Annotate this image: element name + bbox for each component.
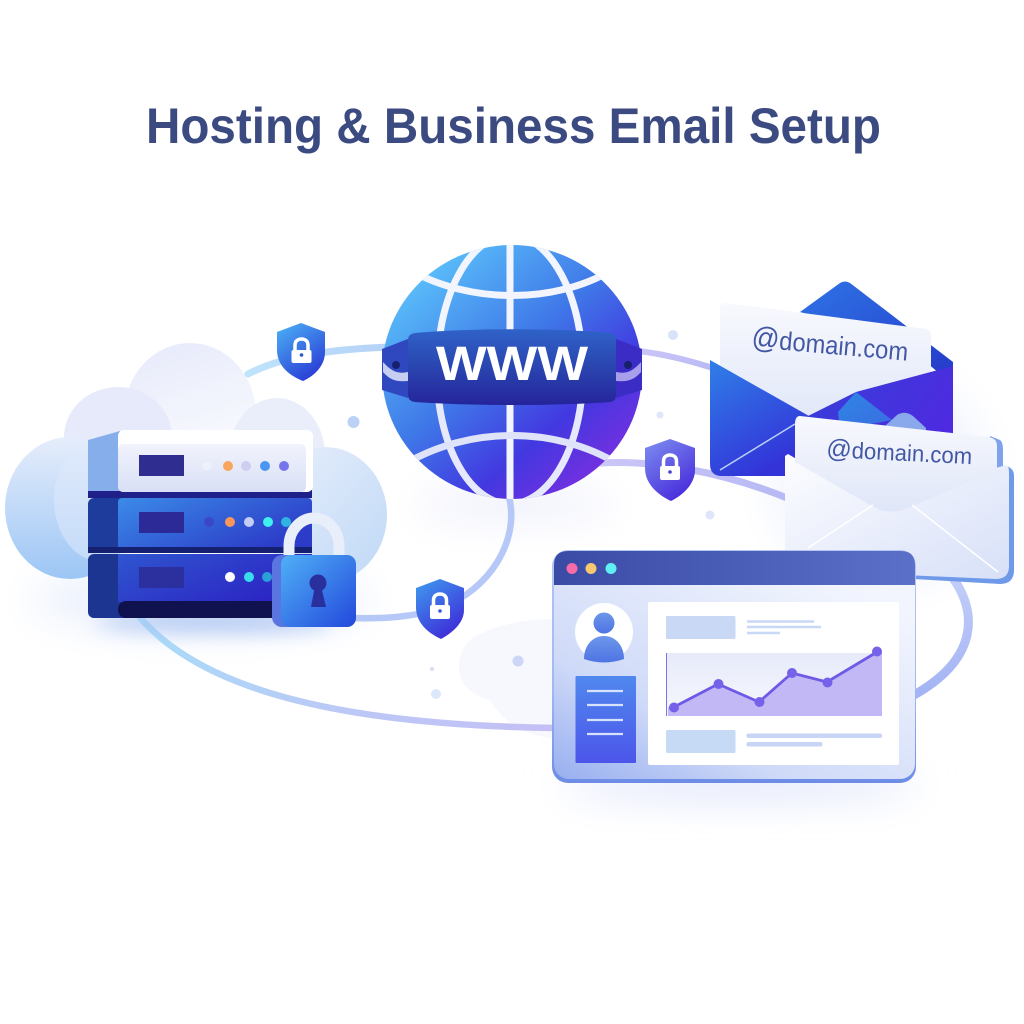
envelope body (785, 454, 1009, 579)
title bar (554, 551, 915, 585)
envelope back flap (800, 282, 953, 385)
user avatar (575, 603, 633, 662)
envelope rim (914, 466, 1014, 584)
address text: @domain.com (750, 321, 910, 368)
small decorative dots (348, 330, 714, 699)
www banner (408, 329, 616, 405)
connector: server to browser (138, 615, 556, 728)
window controls (566, 563, 578, 574)
globe grid lines (414, 245, 610, 499)
server unit: top (88, 430, 313, 498)
line chart (666, 646, 882, 716)
address text: @domain.com (826, 433, 973, 470)
shield: right of globe (645, 439, 695, 501)
letter with address (795, 416, 997, 512)
front envelope (785, 416, 1014, 584)
title: Hosting & Business Email Setup (146, 98, 881, 154)
shield: lower (416, 579, 464, 639)
top placeholder row (666, 616, 821, 639)
connector lines between components (138, 347, 968, 728)
www label: WWW (436, 338, 589, 391)
connector: envelope to browser arc (914, 578, 968, 695)
side band left (382, 339, 408, 398)
back envelope (710, 282, 953, 476)
connector: globe to server lock (350, 497, 511, 618)
connector: globe to back envelope (638, 351, 722, 371)
connector: server to globe (248, 347, 390, 374)
server rack (88, 430, 335, 631)
letter with address (720, 303, 931, 430)
server unit: middle (88, 498, 312, 553)
cloud (5, 343, 387, 583)
sidebar menu (576, 676, 636, 763)
bottom placeholder row (666, 730, 882, 753)
envelope front panels (800, 366, 953, 476)
content panel (648, 602, 899, 765)
server unit: bottom (88, 554, 312, 618)
padlock (272, 518, 356, 627)
side band right (616, 339, 642, 398)
globe (382, 235, 642, 504)
browser window (552, 550, 916, 783)
shield: top left (277, 323, 325, 381)
background glows (30, 370, 990, 797)
connector: globe to front envelope (600, 462, 792, 500)
